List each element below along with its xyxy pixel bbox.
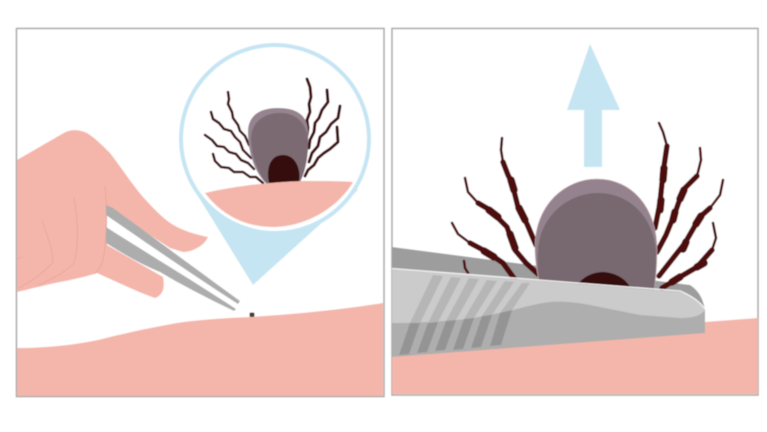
panel: pulling the tick out bbox=[392, 28, 758, 395]
panel frame left bbox=[16, 28, 384, 396]
callout: magnified tick bbox=[181, 45, 369, 285]
tick on skin bbox=[250, 312, 254, 317]
magnified tick head bbox=[268, 155, 299, 186]
tick head right panel bbox=[578, 272, 630, 287]
magnified skin bbox=[205, 181, 353, 227]
grip stripes upper bbox=[410, 275, 530, 323]
panel frame right bbox=[392, 28, 758, 395]
hand bbox=[17, 130, 208, 298]
tick legs right panel bbox=[452, 123, 723, 288]
grip stripes lower bbox=[399, 310, 512, 355]
magnified tick body bbox=[248, 108, 308, 185]
panel: locating the tick bbox=[16, 28, 384, 396]
magnifier ring bbox=[181, 45, 369, 233]
tweezers left bbox=[106, 205, 240, 311]
tweezer back blade bbox=[392, 247, 705, 310]
arrow: pull upward bbox=[567, 44, 620, 167]
magnified tick legs bbox=[205, 79, 340, 183]
tweezer front blade bbox=[392, 268, 705, 357]
tick body right panel bbox=[535, 179, 657, 290]
skin surface left bbox=[17, 303, 383, 396]
skin surface right bbox=[392, 318, 758, 394]
magnifier pin bbox=[188, 139, 358, 285]
